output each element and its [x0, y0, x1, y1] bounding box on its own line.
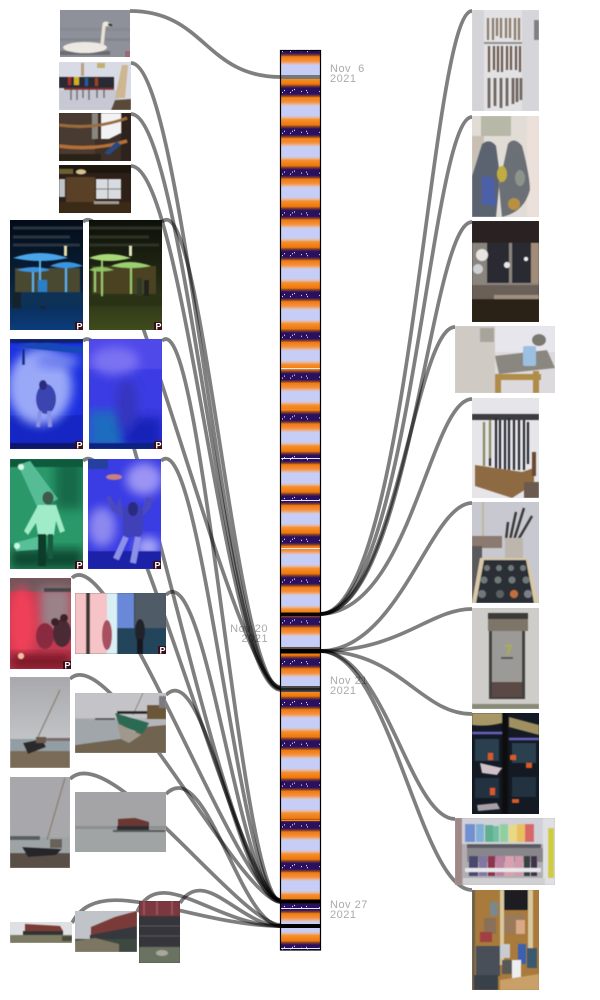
photo: palette knives on door: [472, 10, 539, 111]
photo: dancer in blue light: P: [154, 560, 161, 570]
photo: green lit canopy: P: [156, 322, 162, 332]
connectors: timeline to right photos: [320, 11, 472, 890]
photo: blue lit canopy: P: [76, 322, 83, 332]
photo: brushes in wooden block: [472, 398, 539, 498]
date label: Nov 21 2021: 2021: [330, 685, 356, 697]
photo: room with hanging lights: [472, 221, 539, 322]
connectors: left photos to timeline: [70, 11, 281, 926]
timeline bar: day and night bands: [280, 50, 321, 950]
photo: blue lit canopy: [10, 220, 83, 332]
photo: figures in red smoke: P: [64, 660, 71, 670]
photo: sailboat on shore: [10, 777, 70, 868]
photo: green lit canopy: [89, 220, 162, 332]
photo: workshop interior: [59, 165, 131, 213]
photo: figure in green light: [10, 459, 83, 570]
photo: barge panorama: [10, 922, 72, 943]
photo: grounded green hull: [75, 693, 166, 753]
photo: stool with bottle: [455, 326, 555, 393]
photo: beached sailboat: [10, 677, 70, 768]
date label: Nov 20 2021: Nov 20: [230, 623, 268, 635]
photo: blue fog with figure: P: [76, 440, 83, 450]
photo: blue fog with figure: [10, 339, 83, 450]
photo: barge wall: [139, 901, 180, 963]
photo: garlands in workshop: [59, 113, 131, 161]
photo: blue haze with faint figure: [89, 339, 162, 450]
photo: dancer in blue light: [88, 459, 161, 570]
photo: thread spools on shelf: [455, 818, 555, 885]
photo: paint jars and brushes: [472, 502, 539, 603]
photo: barge hull close: [75, 911, 137, 952]
date label: Nov 20 2021: 2021: [242, 633, 268, 645]
date label: Nov 27 2021: 2021: [330, 909, 356, 921]
photo: red barge on water: [75, 792, 166, 852]
photo: figures in red smoke: [10, 578, 71, 670]
photo: paint-spattered coats: [472, 116, 539, 217]
photo: white wall with door: [472, 608, 539, 709]
photo: figures by neon doorway: P: [160, 646, 166, 656]
photo: figures by neon doorway: [75, 593, 166, 656]
date label: Nov 27 2021: Nov 27: [330, 899, 368, 911]
photo: blue haze with faint figure: P: [156, 440, 162, 450]
photo: pegboard with tools: [472, 890, 539, 990]
photo: 3D printers: [472, 713, 539, 814]
date label: Nov 21 2021: Nov 21: [330, 675, 368, 687]
photo: swan: [60, 10, 130, 57]
photo: figure in green light: P: [76, 560, 83, 570]
date label: Nov 6 2021: Nov 6: [330, 63, 365, 75]
date label: Nov 6 2021: 2021: [330, 73, 356, 85]
photo: tools on wall: [59, 62, 131, 110]
